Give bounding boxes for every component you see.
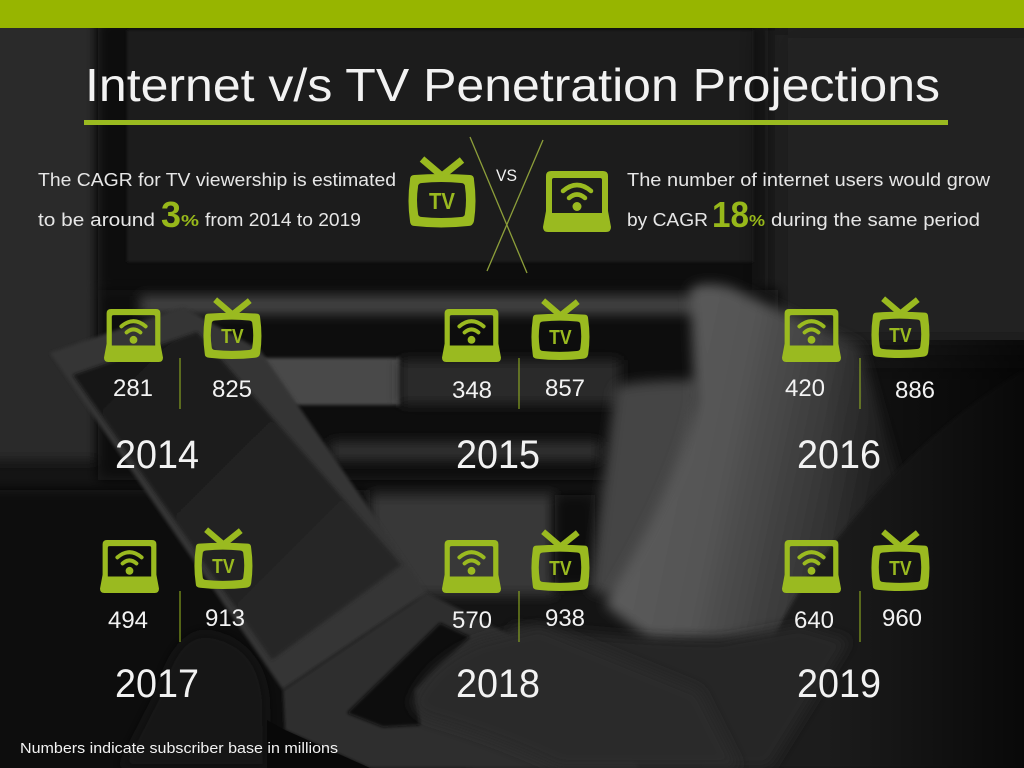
text: cagr for tv viewership: The CAGR for TV viewership is estimated xyxy=(38,169,396,190)
panel: 2016 xyxy=(782,299,935,477)
icon: tv 2019: TV xyxy=(889,558,912,580)
panel: 2019 xyxy=(782,532,929,706)
icon: laptop 2015 xyxy=(442,309,501,362)
icon: laptop 2016 xyxy=(782,309,841,362)
text: by cagr: by CAGR xyxy=(627,209,708,230)
year 2016: 2016 xyxy=(797,433,881,477)
divider 2017 xyxy=(180,591,181,642)
panel: 2015 xyxy=(442,301,589,477)
icon: tv 2019 xyxy=(871,532,929,591)
icon: laptop 2019 xyxy=(782,540,841,593)
text: from 2014 to 2019: from 2014 to 2019 xyxy=(205,209,361,230)
year 2015: 2015 xyxy=(456,433,540,477)
icon: tv 2015 xyxy=(531,301,589,360)
vs label: VS xyxy=(496,166,517,185)
percent sign: % xyxy=(749,213,765,230)
icon: large tv xyxy=(408,159,476,228)
year 2014: 2014 xyxy=(115,433,199,477)
divider 2015 xyxy=(518,358,520,409)
value: tv 2014: 825 xyxy=(212,376,252,403)
icon: laptop 2017 xyxy=(100,540,159,593)
value: tv 2015: 857 xyxy=(545,375,585,402)
icon: tv 2014 xyxy=(203,300,261,359)
panel: 2017 xyxy=(100,530,252,706)
value: tv 2019: 960 xyxy=(882,605,922,632)
top accent bar xyxy=(0,0,1024,28)
icon: tv 2018 xyxy=(531,532,589,591)
icon: laptop 2014 xyxy=(104,309,163,362)
panel: 2018 xyxy=(442,532,589,706)
value: 18 percent: 18 xyxy=(712,194,749,235)
icon: tv 2017 xyxy=(194,530,252,589)
value: 3 percent: 3 xyxy=(161,194,181,235)
footnote: Numbers indicate subscriber base in millions xyxy=(20,741,338,757)
percent sign: % xyxy=(181,213,199,230)
icon: tv 2017: TV xyxy=(212,556,235,578)
vs crossed lines xyxy=(470,137,543,273)
panel: tv viewership statement xyxy=(38,169,396,235)
icon: tv 2015: TV xyxy=(549,327,572,349)
value: tv 2017: 913 xyxy=(205,605,245,632)
text: during the same period: during the same period xyxy=(771,209,980,230)
icon: tv 2018: TV xyxy=(549,558,572,580)
divider 2019 xyxy=(860,591,861,642)
panel: 2014 xyxy=(104,300,261,477)
icon: laptop 2018 xyxy=(442,540,501,593)
divider 2018 xyxy=(518,591,520,642)
icon: large tv: TV xyxy=(429,188,456,214)
value: internet 2016: 420 xyxy=(785,375,825,402)
value: internet 2018: 570 xyxy=(452,607,492,634)
icon: large laptop wifi xyxy=(543,171,611,232)
icon: tv 2016: TV xyxy=(889,325,912,347)
panel: internet users statement xyxy=(627,169,991,235)
divider 2014 xyxy=(180,358,181,409)
value: tv 2018: 938 xyxy=(545,605,585,632)
value: internet 2015: 348 xyxy=(452,377,492,404)
divider 2016 xyxy=(860,358,861,409)
title underline xyxy=(84,120,948,125)
year 2018: 2018 xyxy=(456,662,540,706)
icon: tv 2016 xyxy=(871,299,929,358)
value: internet 2019: 640 xyxy=(794,607,834,634)
year 2017: 2017 xyxy=(115,662,199,706)
text: to be around: to be around xyxy=(38,209,155,230)
text: number of internet users: The number of internet users would grow xyxy=(627,169,991,190)
value: internet 2017: 494 xyxy=(108,607,148,634)
icon: tv 2014: TV xyxy=(221,326,244,348)
value: tv 2016: 886 xyxy=(895,377,935,404)
year 2019: 2019 xyxy=(797,662,881,706)
value: internet 2014: 281 xyxy=(113,375,153,402)
title: Internet v/s TV Penetration Projections xyxy=(85,59,940,111)
